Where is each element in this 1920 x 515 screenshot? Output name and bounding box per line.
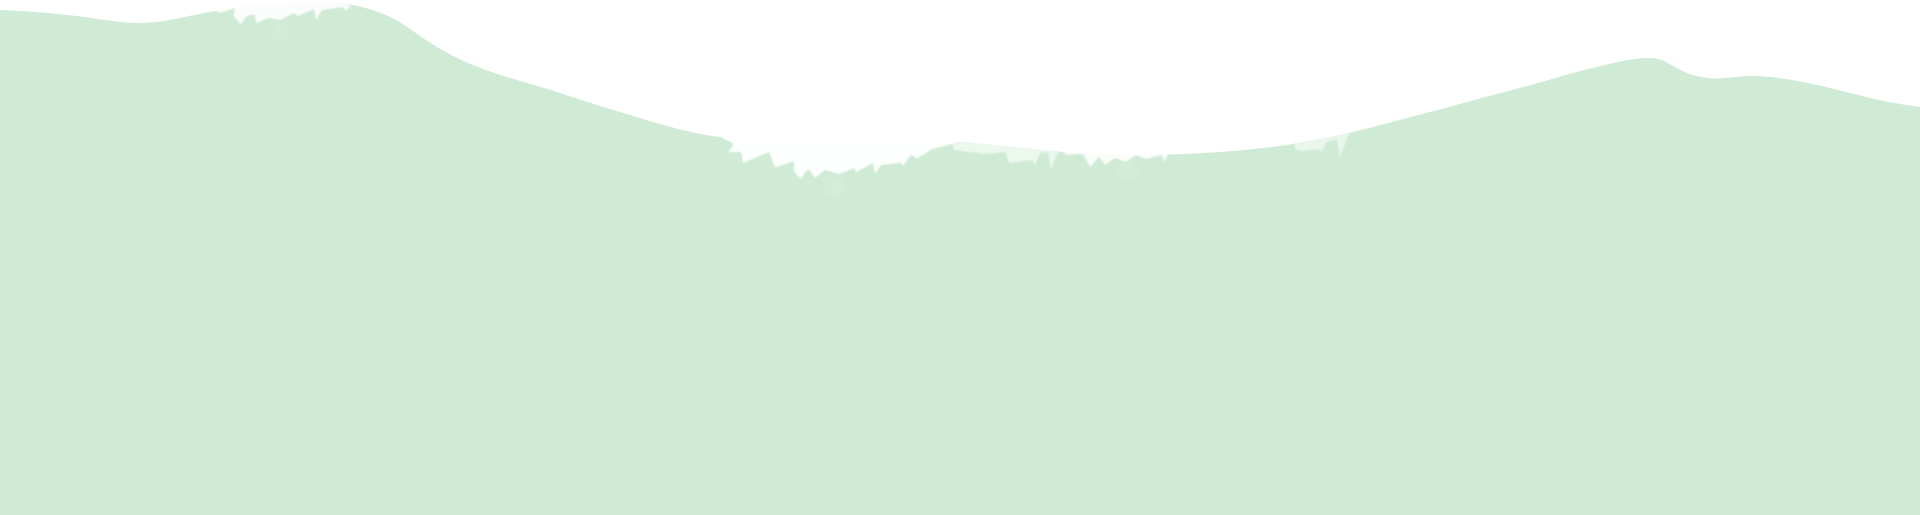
paint splash: right-of-centre drips — [1062, 151, 1168, 167]
paint splash: left crest — [216, 0, 351, 24]
paint splash: centre dip — [728, 138, 953, 179]
faint smudges — [273, 23, 1137, 195]
paint splash: right slope drips — [1294, 133, 1349, 157]
paint splash: faint centre-right streaks — [952, 142, 1064, 170]
